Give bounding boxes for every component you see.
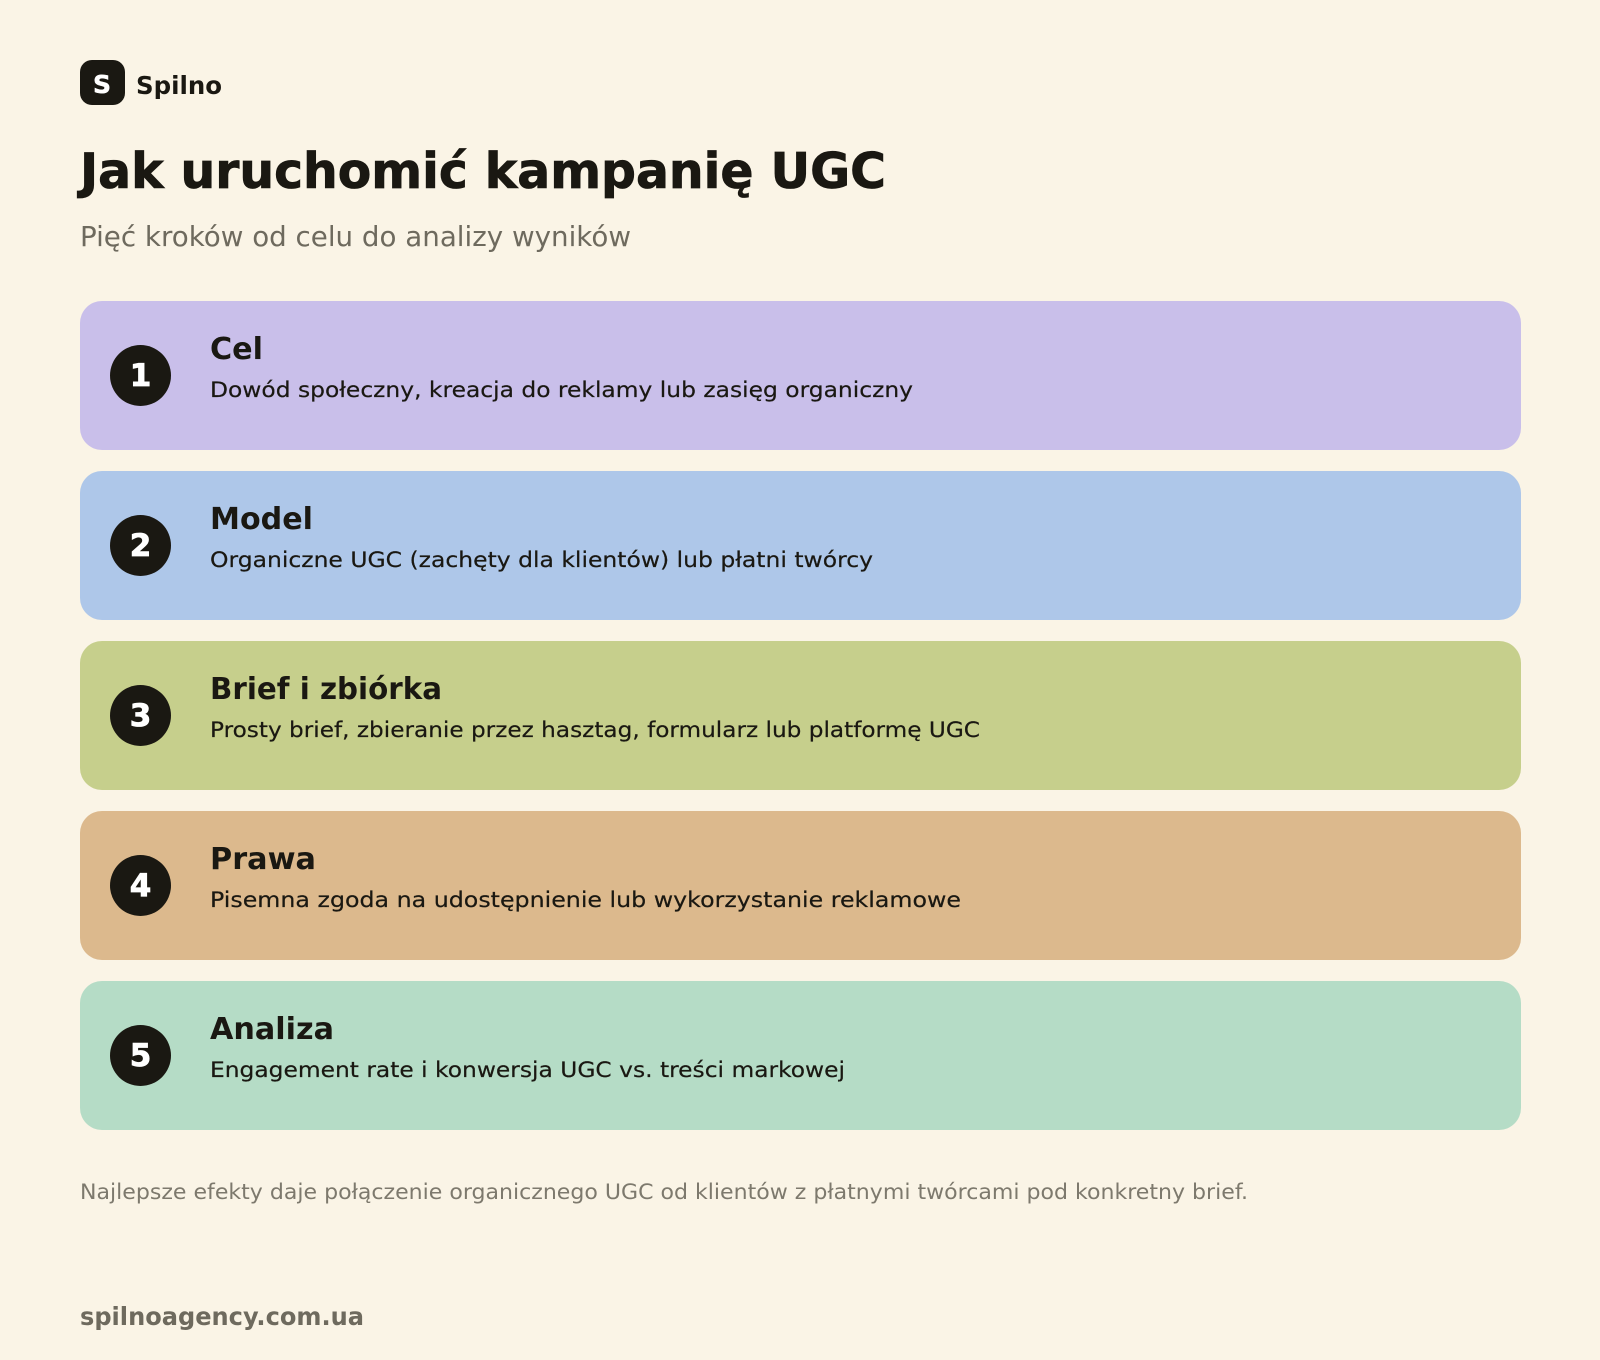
icon: number 1: 1 xyxy=(130,358,151,394)
icon: number 5 xyxy=(110,1025,171,1086)
description: Analiza: Engagement rate i konwersja UGC vs. treści markowej xyxy=(210,1058,845,1083)
heading: Model: Model xyxy=(210,502,313,537)
icon: number 5: 5 xyxy=(130,1038,151,1074)
heading: Brief i zbiórka: Brief i zbiórka xyxy=(210,672,442,707)
panel: step 1 xyxy=(80,301,1521,450)
panel: step 5 xyxy=(80,981,1521,1130)
icon: number 3 xyxy=(110,685,171,746)
title: Jak uruchomić kampanię UGC xyxy=(77,143,886,200)
brand logo xyxy=(80,60,222,105)
panel: step 2 xyxy=(80,471,1521,620)
description: Prawa: Pisemna zgoda na udostępnienie lub wykorzystanie reklamowe xyxy=(210,888,961,913)
subtitle: Pięć kroków od celu do analizy wyników xyxy=(80,221,631,253)
icon: number 4 xyxy=(110,855,171,916)
heading: Analiza: Analiza xyxy=(210,1012,334,1047)
description: Cel: Dowód społeczny, kreacja do reklamy lub zasięg organiczny xyxy=(210,378,913,403)
description: Brief i zbiórka: Prosty brief, zbieranie przez hasztag, formularz lub platformę UGC xyxy=(210,718,980,743)
icon: number 3: 3 xyxy=(130,698,151,734)
icon: number 2: 2 xyxy=(130,528,151,564)
icon: number 2 xyxy=(110,515,171,576)
icon: number 1 xyxy=(110,345,171,406)
heading: Prawa: Prawa xyxy=(210,842,316,877)
heading: Cel: Cel xyxy=(210,332,263,367)
icon: logo mark xyxy=(80,60,125,105)
footer url: spilnoagency.com.ua xyxy=(80,1302,364,1331)
description: Model: Organiczne UGC (zachęty dla klientów) lub płatni twórcy xyxy=(210,548,873,573)
icon: number 4: 4 xyxy=(130,868,151,904)
panel: step 4 xyxy=(80,811,1521,960)
brand name: Spilno xyxy=(136,71,222,100)
icon: logo mark: S xyxy=(93,70,111,99)
closing note: Najlepsze efekty daje połączenie organicznego UGC od klientów z płatnymi twórcami pod konkretny brief. xyxy=(80,1180,1248,1205)
panel: step 3 xyxy=(80,641,1521,790)
